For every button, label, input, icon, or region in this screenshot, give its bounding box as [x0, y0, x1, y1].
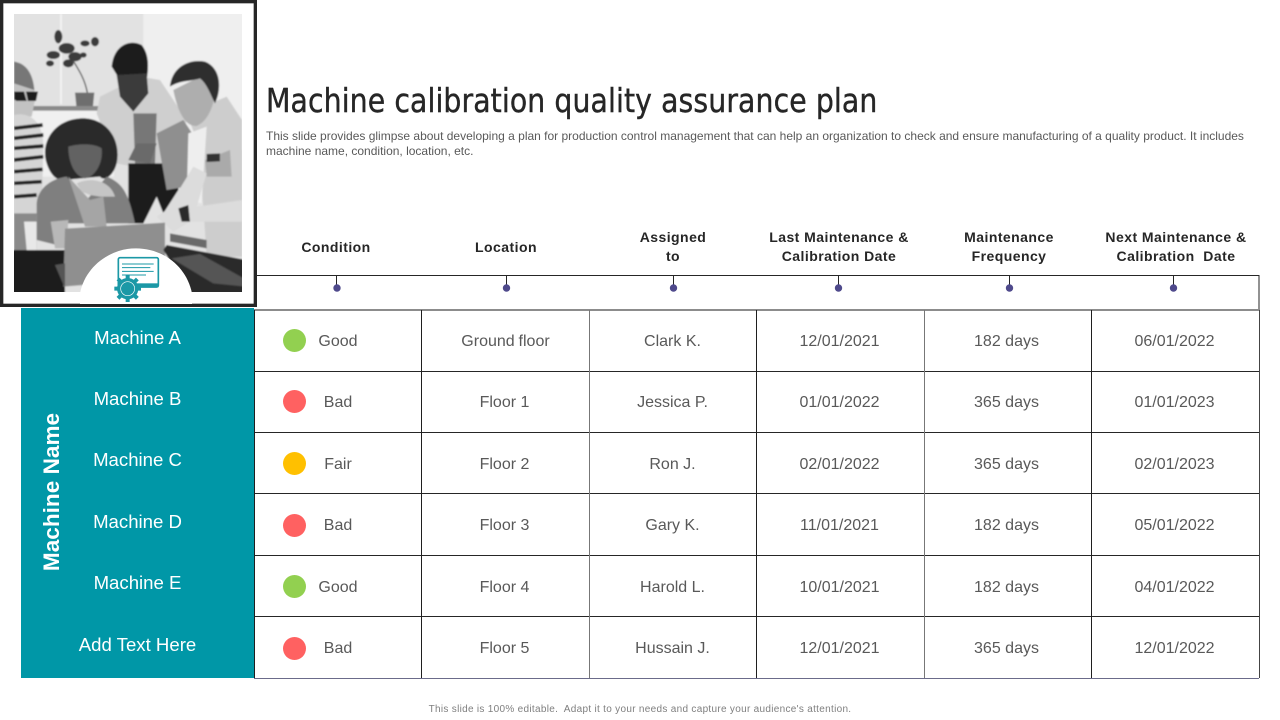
title: Machine calibration quality assurance plan — [266, 81, 877, 120]
header: location: Location — [475, 239, 537, 255]
description: machine name, condition, location, etc. — [266, 144, 473, 158]
table cell text: 01/01/2023 — [1134, 394, 1215, 411]
table cell text: 365 days — [974, 394, 1039, 411]
vertical axis label: Machine Name — [39, 413, 64, 571]
table cell text: Floor 3 — [480, 517, 529, 534]
header: assigned to: to — [666, 248, 680, 264]
table cell text: Floor 1 — [480, 394, 529, 411]
table cell text: Ground floor — [461, 333, 550, 350]
header: next maintenance: Next Maintenance & — [1105, 229, 1247, 245]
machine name panel — [21, 308, 254, 678]
machine row labels: Machine B — [94, 388, 181, 409]
header: frequency — [964, 229, 1054, 264]
table grid — [254, 309, 1260, 679]
machine row labels: Machine C — [93, 449, 182, 470]
table cell text: 182 days — [974, 579, 1039, 596]
machine row labels: Machine A — [94, 327, 181, 348]
table cell text: Floor 2 — [480, 456, 529, 473]
description — [266, 129, 1244, 158]
table cell text: 365 days — [974, 456, 1039, 473]
table cell text: Clark K. — [644, 333, 701, 350]
photo: team around a laptop — [10, 10, 247, 297]
header: frequency: Maintenance — [964, 229, 1054, 245]
machine row labels: Machine E — [94, 572, 181, 593]
table cell text: 02/01/2022 — [799, 456, 880, 473]
table cell text: Good — [318, 333, 358, 350]
table cell text: Good — [318, 579, 358, 596]
photo frame — [0, 0, 257, 307]
header: assigned to — [640, 229, 706, 264]
table cell text: Bad — [324, 517, 352, 534]
header: last maintenance — [769, 229, 909, 264]
table cell text: Fair — [324, 456, 352, 473]
header connector markers — [257, 275, 1260, 309]
table cell text: 11/01/2021 — [800, 517, 879, 534]
header: last maintenance: Calibration Date — [782, 248, 896, 264]
machine row labels — [78, 327, 196, 655]
header: assigned to: Assigned — [640, 229, 706, 245]
table cell text: Floor 5 — [480, 640, 529, 657]
table cell text: Gary K. — [645, 517, 700, 534]
table cell text: Bad — [324, 640, 352, 657]
header: last maintenance: Last Maintenance & — [769, 229, 909, 245]
table cell text: Harold L. — [640, 579, 705, 596]
table cell text: 12/01/2021 — [799, 333, 880, 350]
table cell text: 05/01/2022 — [1134, 517, 1215, 534]
column headers — [301, 229, 1247, 264]
header: condition: Condition — [301, 239, 371, 255]
table cell text: Ron J. — [649, 456, 696, 473]
condition status dots — [283, 329, 306, 660]
table cell text: 06/01/2022 — [1134, 333, 1215, 350]
header: next maintenance — [1105, 229, 1247, 264]
machine row labels: Add Text Here — [79, 634, 196, 655]
table cell text: 182 days — [974, 333, 1039, 350]
machine row labels: Machine D — [93, 511, 182, 532]
table cell text: 01/01/2022 — [799, 394, 880, 411]
table cell text: 12/01/2022 — [1134, 640, 1215, 657]
description: This slide provides glimpse about developing a plan for production control management that can help an organization to check and ensure manufacturing of a quality product. It includes — [266, 129, 1244, 143]
table cell text: 182 days — [974, 517, 1039, 534]
table cell text: Bad — [324, 394, 352, 411]
table cell text: Floor 4 — [480, 579, 529, 596]
header: next maintenance: Calibration Date — [1117, 248, 1235, 264]
table cell text: 02/01/2023 — [1134, 456, 1215, 473]
table cell text: Jessica P. — [637, 394, 708, 411]
table cell text: 10/01/2021 — [799, 579, 880, 596]
footer note: This slide is 100% editable. Adapt it to your needs and capture your audience's attention. — [429, 704, 851, 715]
table cell text: Hussain J. — [635, 640, 710, 657]
table cell text: 365 days — [974, 640, 1039, 657]
table cell text: 04/01/2022 — [1134, 579, 1215, 596]
icon badge: screen with gear — [80, 248, 192, 304]
header: frequency: Frequency — [972, 248, 1046, 264]
table cell text: 12/01/2021 — [799, 640, 880, 657]
table cell text — [318, 333, 1215, 657]
